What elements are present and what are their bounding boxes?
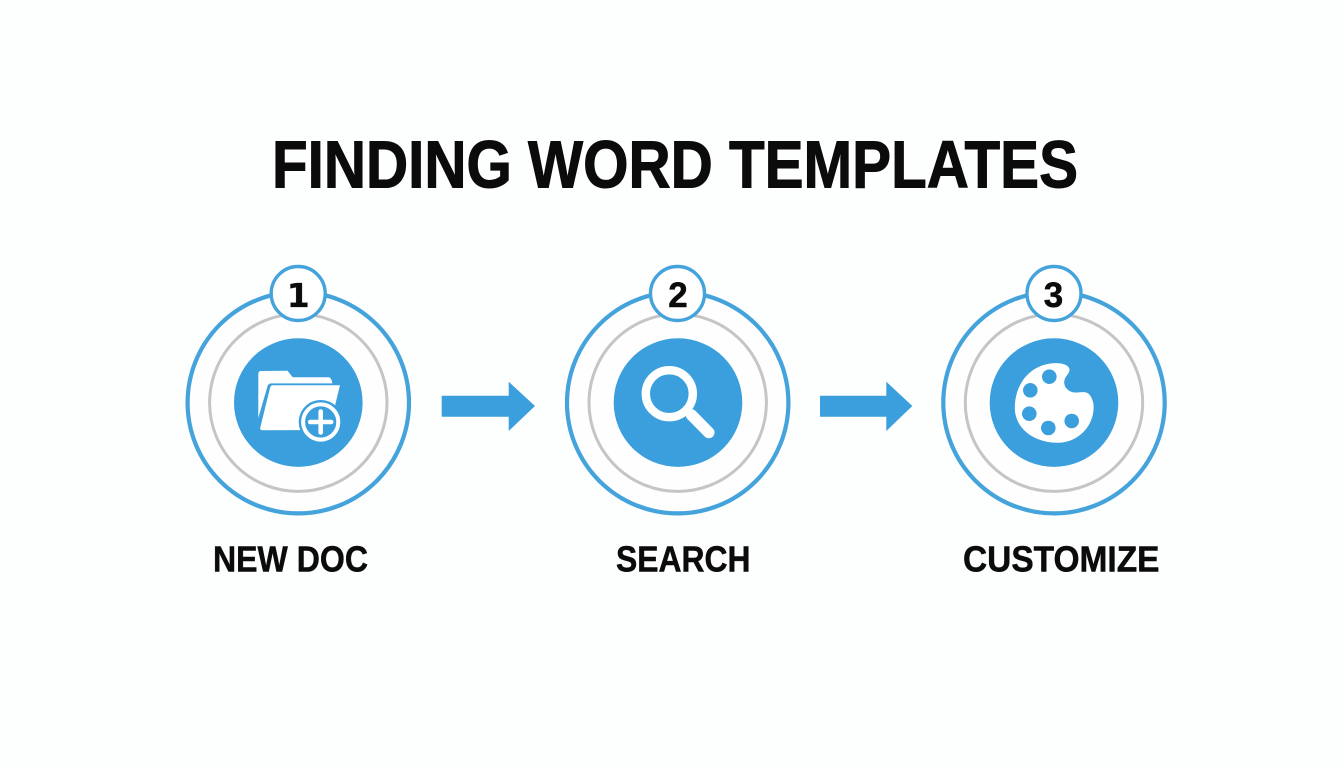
icon: paint palette <box>1015 363 1094 443</box>
inner grey ring 3 <box>965 314 1143 491</box>
icon disc 2 <box>614 338 742 467</box>
step 1: new doc <box>188 266 409 513</box>
number badge 2 <box>650 266 704 320</box>
inner grey ring 1 <box>210 314 387 491</box>
step 2: search <box>567 266 788 513</box>
outer ring 3 <box>943 292 1165 513</box>
inner grey ring 2 <box>589 314 766 491</box>
step 3: customize <box>943 266 1165 513</box>
label: customize: CUSTOMIZE <box>963 538 1160 580</box>
icon disc 1 <box>234 338 363 467</box>
number badge 3 <box>1027 266 1081 320</box>
number badge 2: 2 <box>668 276 688 315</box>
label: new doc: NEW DOC <box>213 538 368 580</box>
label: search: SEARCH <box>616 538 750 580</box>
arrow 1 <box>442 382 535 431</box>
icon: folder with plus <box>258 371 343 444</box>
outer ring 1 <box>188 292 409 513</box>
icon disc 3 <box>990 338 1118 467</box>
icon: magnifying glass <box>646 370 709 432</box>
number badge 3: 3 <box>1044 276 1063 315</box>
number badge 1: 1 <box>287 276 310 315</box>
title: FINDING WORD TEMPLATES <box>272 128 1078 202</box>
arrow 2 <box>820 382 912 431</box>
outer ring 2 <box>567 292 788 513</box>
number badge 1 <box>271 266 325 320</box>
